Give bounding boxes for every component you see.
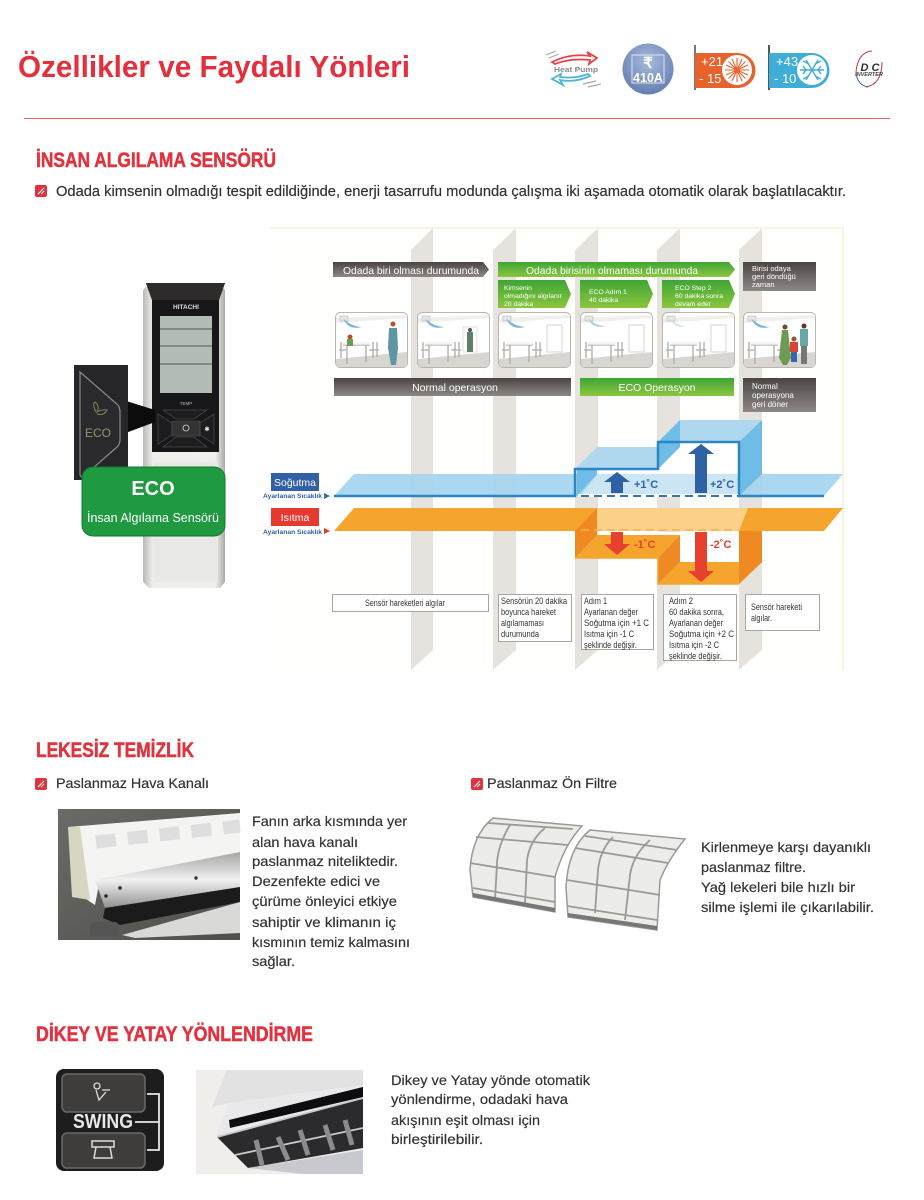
note box 4: Soğutma için +2 C	[669, 629, 734, 640]
arrow: -1 C	[604, 532, 655, 555]
text: filter	[701, 839, 874, 915]
note box 5	[746, 594, 820, 630]
banner: return: geri döndüğü	[752, 272, 796, 281]
subheading: front filter: Paslanmaz Ön Filtre	[487, 774, 617, 791]
note box 2	[498, 594, 572, 642]
arrow: -2 C	[688, 532, 731, 582]
label: cooling	[263, 473, 330, 500]
bar: back to normal: operasyona	[752, 391, 794, 400]
label: heating	[263, 508, 330, 536]
bar: normal operation	[334, 378, 571, 396]
pillars	[411, 228, 762, 670]
icon: swing buttons	[56, 1069, 164, 1171]
text: air duct: alan hava kanalı	[252, 834, 358, 850]
note box 2: algılamaması	[501, 618, 544, 629]
note box 4: Isıtma için -2 C	[669, 640, 719, 651]
remote control: TEMP	[180, 401, 192, 406]
icon: DC inverter	[855, 51, 883, 87]
subheading: air duct: Paslanmaz Hava Kanalı	[56, 775, 209, 791]
banner: return: zaman	[752, 280, 775, 289]
step: ECO 1: 40 dakika	[589, 297, 618, 304]
note box 3: Ayarlanan değer	[584, 607, 638, 618]
icon: heat pump	[546, 51, 601, 87]
step: ECO 2: ECO Step 2	[675, 285, 711, 292]
icon: cooling range	[768, 45, 830, 90]
note box 1: Sensör hareketleri algılar	[365, 598, 445, 609]
icon: R410A refrigerant: ₹	[643, 55, 653, 72]
note box 1	[332, 594, 488, 612]
text: filter: Yağ lekeleri bile hızlı bir	[701, 879, 855, 895]
arrow: +2 C: +2˚C	[710, 479, 734, 491]
text: air duct: Dezenfekte edici ve	[252, 873, 380, 889]
heading: swing: DİKEY VE YATAY YÖNLENDİRME	[36, 1023, 313, 1046]
icon: R410A refrigerant: 410A	[633, 71, 663, 85]
remote control: ✱	[204, 426, 210, 433]
photo: filters	[470, 818, 685, 930]
note box 3	[582, 594, 654, 651]
step: 20 minutes: olmadığını algılanır	[504, 293, 563, 300]
text: air duct: paslanmaz niteliktedir.	[252, 853, 398, 869]
photo: stainless air duct	[58, 809, 240, 940]
note box 4: Adım 2	[669, 596, 693, 607]
text: filter: Kirlenmeye karşı dayanıklı	[701, 839, 871, 855]
note box 2: durumunda	[501, 629, 540, 640]
filter right	[566, 830, 685, 930]
arrow: +2 C	[688, 444, 734, 493]
icon: R410A refrigerant	[622, 44, 674, 94]
bar: back to normal: Normal	[752, 382, 778, 391]
bar: ECO operation: ECO Operasyon	[618, 382, 696, 394]
banner: someone in room: Odada biri olması durumunda	[343, 265, 479, 277]
text: air duct: kısmının temiz kalmasını	[252, 934, 410, 950]
step: ECO 2	[662, 280, 735, 308]
bar: back to normal: geri döner	[752, 400, 788, 409]
icon: heat pump: Heat Pump	[554, 65, 598, 74]
label: heating: Isıtma	[281, 512, 309, 524]
heading: human sensor: İNSAN ALGILAMA SENSÖRÜ	[36, 149, 276, 172]
room illustrations	[336, 312, 816, 368]
note box 3: Isıtma için -1 C	[584, 629, 634, 640]
bar: back to normal	[743, 378, 816, 412]
text: swing	[391, 1072, 591, 1147]
label: heating: Ayarlanan Sıcaklık	[263, 529, 322, 536]
text: swing: yönlendirme, odadaki hava	[391, 1091, 568, 1107]
step: ECO 1	[580, 280, 653, 308]
note box 3: Adım 1	[584, 596, 607, 607]
step: ECO 2: 60 dakika sonra	[675, 293, 723, 300]
note box 5: Sensör hareketi	[751, 602, 802, 613]
text: swing: birleştirilebilir.	[391, 1131, 483, 1147]
title: Özellikler ve Faydalı Yönleri	[18, 49, 410, 84]
step: 20 minutes: 20 dakika	[504, 301, 533, 308]
banner: nobody in room: Odada birisinin olmaması durumunda	[526, 265, 698, 277]
callout: ECO sensor box	[82, 467, 225, 536]
arrow: +1 C: +1˚C	[634, 479, 658, 491]
callout: ECO button	[74, 365, 155, 480]
intro text with bullet: Odada kimsenin olmadığı tespit edildiğinde, enerji tasarrufu modunda çalışma iki aşamada otomatik olarak başlatılacaktır.	[56, 184, 846, 200]
heading: clean: LEKESİZ TEMİZLİK	[36, 739, 194, 762]
banner: nobody in room	[498, 262, 735, 277]
icon: DC inverter: D C	[861, 62, 881, 74]
text: swing: Dikey ve Yatay yönde otomatik	[391, 1072, 591, 1088]
step: 20 minutes	[498, 280, 571, 308]
note box 5: algılar.	[751, 613, 772, 624]
chart: heating band	[334, 508, 843, 584]
callout: ECO button: ECO	[85, 426, 111, 440]
icon: DC inverter: INVERTER	[855, 72, 883, 78]
step: ECO 1: ECO Adım 1	[589, 289, 627, 296]
icon: heating range: +21	[701, 54, 723, 69]
text: air duct: Fanın arka kısmında yer	[252, 813, 407, 829]
bar: ECO operation	[580, 378, 734, 396]
text: filter: silme işlemi ile çıkarılabilir.	[701, 899, 874, 915]
banner: return	[743, 262, 816, 291]
chart: cooling band	[334, 420, 843, 497]
filter left	[470, 818, 582, 912]
note box 4	[664, 594, 736, 662]
text: filter: paslanmaz filtre.	[701, 859, 806, 875]
remote control	[143, 283, 225, 588]
arrow: -1 C: -1˚C	[634, 539, 655, 551]
banner: return: Birisi odaya	[752, 264, 792, 273]
icon: swing buttons: SWING	[73, 1111, 133, 1133]
note box 3: şeklinde değişir.	[584, 640, 637, 651]
note box 2: Sensörün 20 dakika	[501, 596, 568, 607]
note box 4: 60 dakika sonra,	[669, 607, 724, 618]
label: cooling: Ayarlanan Sıcaklık	[263, 493, 322, 500]
arrow: -2 C: -2˚C	[710, 539, 731, 551]
icon: cooling range: +43	[776, 54, 798, 69]
note box 3: Soğutma için +1 C	[584, 618, 649, 629]
text: air duct: sağlar.	[252, 953, 295, 969]
bar: normal operation: Normal operasyon	[412, 382, 498, 394]
callout: ECO sensor box: ECO	[131, 478, 175, 500]
arrow: +1 C	[604, 472, 658, 493]
note box 2: boyunca hareket	[501, 607, 556, 618]
photo: louvers	[196, 1070, 363, 1174]
diagram: ECO operation	[263, 228, 843, 670]
label: cooling: Soğutma	[274, 477, 316, 489]
text: air duct: çürüme önleyici etkiye	[252, 893, 397, 909]
icon: heating range: - 15	[699, 71, 721, 86]
icon: heating range	[694, 45, 756, 90]
text: swing: akışının eşit olması için	[391, 1112, 540, 1128]
step: 20 minutes: Kimsenin	[504, 285, 532, 292]
step: ECO 2: devam eder	[675, 301, 712, 308]
remote control: HITACHI	[173, 304, 199, 311]
callout: ECO sensor box: İnsan Algılama Sensörü	[87, 511, 219, 525]
note box 4: şeklinde değişir.	[669, 651, 722, 662]
text: air duct: sahiptir ve klimanın iç	[252, 914, 396, 930]
text: air duct	[252, 813, 410, 969]
note box 4: Ayarlanan değer	[669, 618, 723, 629]
icon: cooling range: - 10	[774, 71, 796, 86]
